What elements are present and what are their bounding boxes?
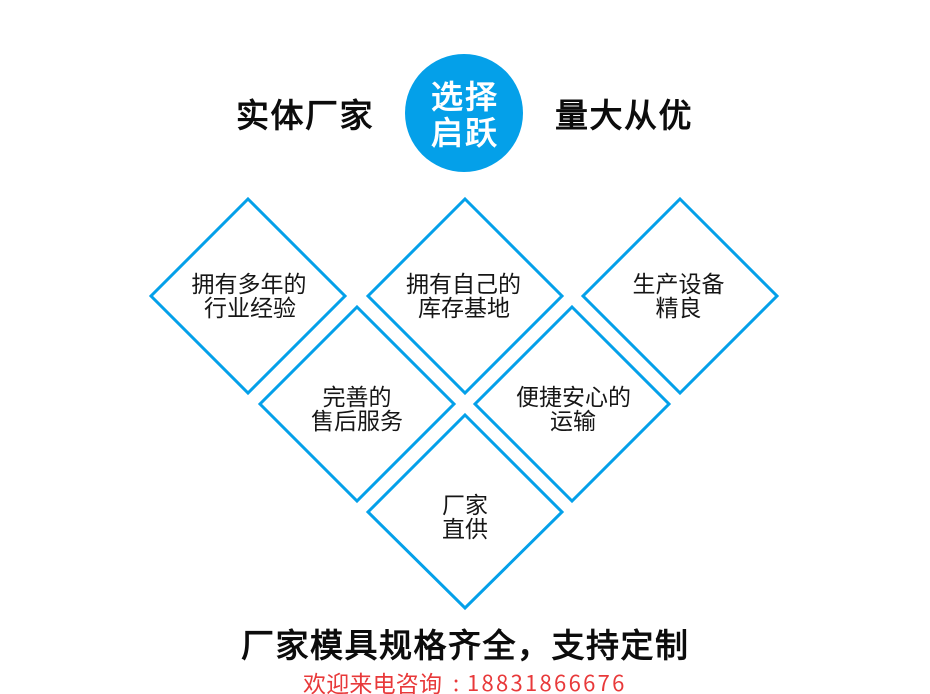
diamond text: equipment — [632, 265, 724, 323]
heading badge circle — [405, 54, 523, 172]
heading badge circle: 启跃 — [431, 108, 499, 154]
bottom headline: 厂家模具规格齐全，支持定制 — [241, 619, 690, 667]
diamond text: equipment: 生产设备 — [632, 265, 724, 299]
diamond text: after-sales: 售后服务 — [311, 402, 403, 436]
diamond text: direct supply: 厂家 — [442, 486, 488, 520]
contact phone — [303, 665, 627, 694]
diamond text: shipping: 运输 — [550, 402, 596, 436]
diamond text: experience: 拥有多年的 — [192, 265, 306, 299]
diamond text: shipping: 便捷安心的 — [516, 378, 631, 412]
diamond text: experience — [192, 265, 306, 323]
diamond text: equipment: 精良 — [656, 289, 702, 323]
heading right: 量大从优 — [555, 89, 693, 137]
diamond text: after-sales — [311, 378, 403, 436]
diamond text: direct supply — [442, 486, 488, 544]
diamond text: warehouse: 拥有自己的 — [406, 265, 521, 299]
diamond text: direct supply: 直供 — [442, 510, 488, 544]
diamond text: warehouse — [406, 265, 521, 323]
diamond text: experience: 行业经验 — [204, 289, 296, 323]
diamond text: after-sales: 完善的 — [322, 378, 392, 412]
heading left: 实体厂家 — [236, 89, 374, 137]
heading badge circle: 选择 — [431, 72, 499, 118]
diamond text: warehouse: 库存基地 — [418, 289, 510, 323]
diamond text: shipping — [516, 378, 631, 436]
